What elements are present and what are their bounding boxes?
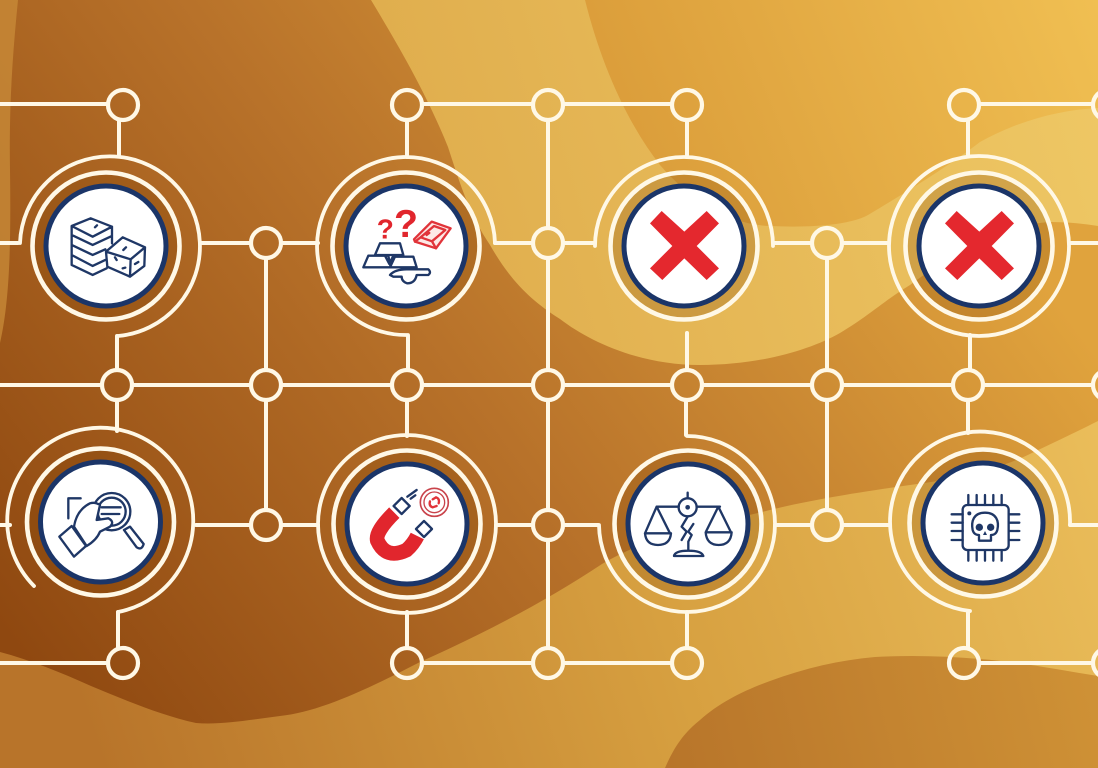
icon: gold bars with question marks: ? [394,202,418,246]
icon: hand holding magnifying glass [59,493,144,557]
icon: red cross [650,211,719,280]
panel: compromised microchip [890,432,1070,611]
connector network [0,104,1098,663]
panel: magnet attracting coin [318,435,496,613]
panel: stacked blocks and cube [20,156,200,336]
panel: rejected item one [595,157,773,320]
panel: questioned gold bars [317,157,495,335]
panel: hand with magnifier [7,428,193,612]
connector nodes [102,90,1098,678]
panel: broken scales [599,436,775,612]
icon: chip with skull [952,495,1019,561]
icon: magnet and coin [377,488,448,553]
icon: cracked balance scale [645,493,732,556]
icon: stacked blocks and cube [72,218,145,277]
icon: gold bars with question marks [363,202,451,283]
panel: rejected item two [889,156,1069,336]
icon: red cross [945,211,1014,280]
icon: gold bars with question marks: ? [377,213,394,244]
